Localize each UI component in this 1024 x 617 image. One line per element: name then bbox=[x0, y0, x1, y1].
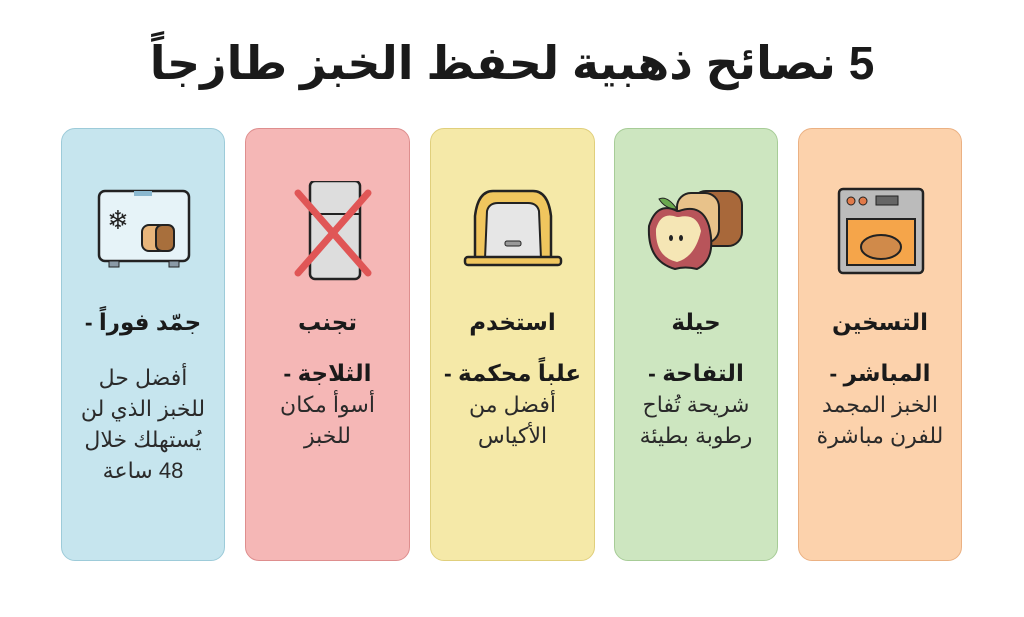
panel: airtight box bbox=[430, 128, 595, 561]
text: أفضل حل bbox=[99, 365, 187, 390]
text: للخبز الذي لن bbox=[81, 396, 205, 421]
text: 48 ساعة bbox=[103, 458, 183, 483]
heading: استخدم bbox=[469, 309, 556, 335]
text bbox=[817, 360, 943, 448]
text: علباً محكمة - bbox=[444, 360, 581, 386]
icon: bread box bbox=[464, 190, 562, 266]
panel: avoid fridge bbox=[245, 128, 410, 561]
title: 5 نصائح ذهبية لحفظ الخبز طازجاً bbox=[150, 37, 874, 89]
text: التفاحة - bbox=[648, 360, 744, 386]
text: للخبز bbox=[304, 423, 351, 448]
text: يُستهلك خلال bbox=[84, 427, 202, 452]
text: أفضل من bbox=[469, 392, 556, 417]
text bbox=[280, 360, 375, 448]
icon: oven with bread bbox=[838, 188, 924, 274]
icon: freezer with bread bbox=[98, 190, 190, 268]
panel: freeze bbox=[61, 128, 225, 561]
icon: freezer with bread: ❄ bbox=[107, 205, 129, 235]
heading: تجنب bbox=[298, 309, 357, 335]
heading: حيلة bbox=[671, 309, 721, 335]
panel: apple trick bbox=[614, 128, 778, 561]
text: رطوبة بطيئة bbox=[640, 423, 752, 448]
heading: التسخين bbox=[832, 309, 928, 335]
text: الخبز المجمد bbox=[822, 392, 938, 417]
text bbox=[640, 360, 752, 448]
text: الأكياس bbox=[478, 423, 547, 448]
text bbox=[81, 363, 205, 483]
text: الثلاجة - bbox=[284, 360, 371, 386]
icon: apple and bread bbox=[648, 190, 743, 270]
text: المباشر - bbox=[830, 360, 930, 386]
text: للفرن مباشرة bbox=[817, 423, 943, 448]
text: أسوأ مكان bbox=[280, 392, 375, 417]
panel: direct heating bbox=[798, 128, 962, 561]
icon: crossed fridge bbox=[294, 181, 372, 280]
heading: جمّد فوراً - bbox=[85, 309, 201, 335]
text: شريحة تُفاح bbox=[643, 392, 749, 417]
text bbox=[444, 357, 581, 448]
